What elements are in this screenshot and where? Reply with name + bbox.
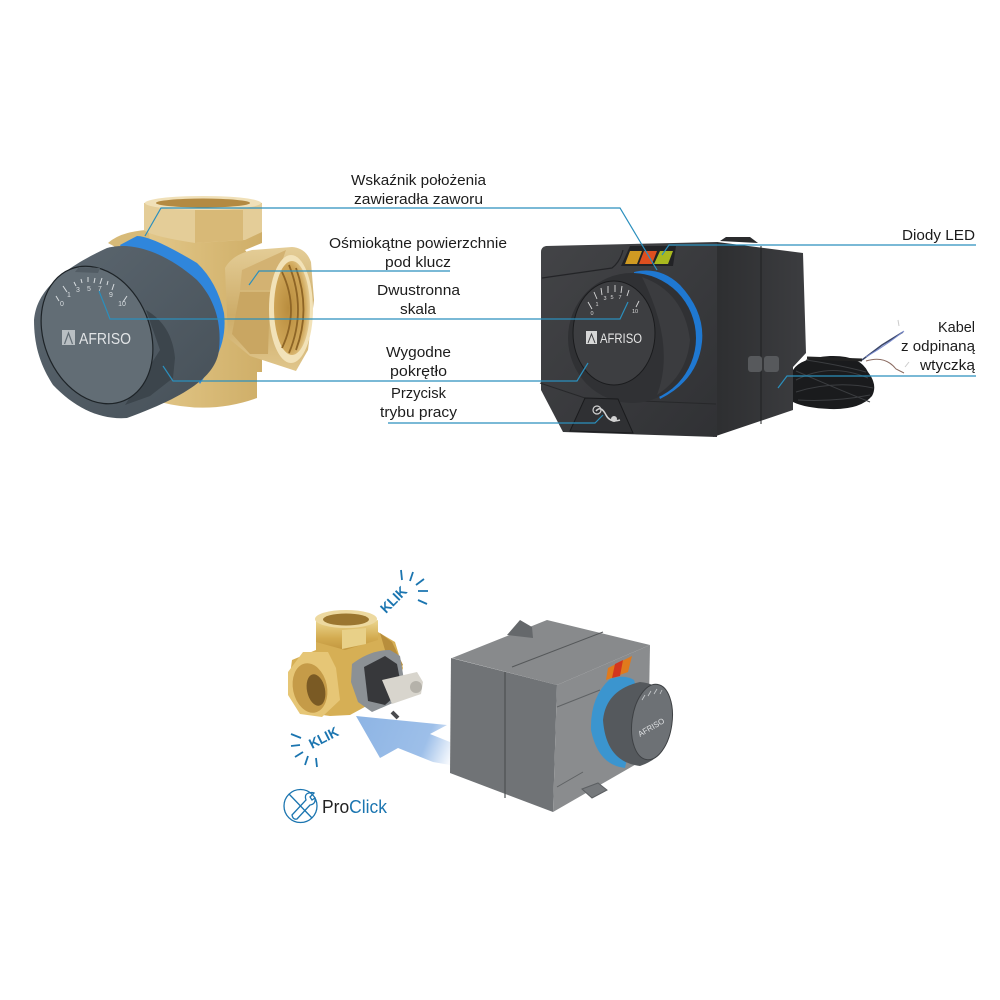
label: Wygodne pokrętło	[386, 344, 451, 380]
blue position ring	[120, 236, 225, 384]
actuator knob	[568, 273, 696, 403]
label: Kabel z odpinaną wtyczką	[901, 319, 976, 374]
gray knob	[603, 682, 672, 766]
coupling	[351, 650, 423, 718]
knob body	[34, 246, 220, 418]
knob face with scale: 9	[109, 292, 113, 299]
valve brass body	[108, 196, 314, 408]
actuator dial face: 10	[632, 309, 638, 315]
left face	[450, 658, 557, 812]
gray actuator LEDs	[606, 656, 632, 680]
knob face with scale: 0	[60, 301, 64, 308]
LED indicators	[621, 246, 676, 266]
insertion arrow	[356, 716, 450, 765]
actuator dial face	[573, 281, 655, 385]
label: Wygodne pokrętło: pokrętło	[390, 363, 447, 380]
label: Wskaźnik położenia zawieradła zaworu	[351, 172, 487, 208]
label: Dwustronna skala	[377, 282, 461, 318]
knob face with scale	[21, 249, 173, 421]
actuator dial face: 3	[603, 296, 607, 302]
label: Wskaźnik położenia zawieradła zaworu: zawieradła zaworu	[354, 191, 483, 208]
knob face with scale: 5	[87, 286, 91, 293]
label: Ośmiokątne powierzchnie pod klucz: Ośmiokątne powierzchnie	[329, 235, 507, 252]
mode button	[570, 398, 633, 433]
actuator dial face: 5	[610, 295, 614, 301]
actuator dial face: 7	[618, 295, 622, 301]
label: Kabel z odpinaną wtyczką: wtyczką	[919, 357, 976, 374]
KLIK bottom: KLIK	[306, 723, 341, 752]
ProClick logo	[284, 790, 388, 822]
label: Ośmiokątne powierzchnie pod klucz: pod klucz	[385, 254, 451, 271]
label: Ośmiokątne powierzchnie pod klucz	[329, 235, 507, 271]
label: Przycisk trybu pracy: trybu pracy	[380, 404, 458, 421]
knob face with scale: 10	[118, 301, 126, 308]
right face	[553, 645, 650, 812]
AFRISO logo: AFRISO	[600, 331, 642, 346]
brass valve with knob	[21, 196, 314, 421]
icon: crossed wrench	[284, 790, 317, 822]
label: Diody LED: Diody LED	[902, 227, 975, 244]
label: Kabel z odpinaną wtyczką: Kabel	[938, 319, 975, 336]
blue ring	[634, 271, 702, 399]
label: Kabel z odpinaną wtyczką: z odpinaną	[901, 338, 976, 355]
actuator dial face: 0	[590, 311, 594, 317]
AFRISO logo	[62, 330, 131, 348]
black actuator with cable	[540, 237, 909, 437]
actuator front	[541, 242, 717, 437]
top face	[452, 620, 650, 685]
actuator dial face: 1	[595, 302, 599, 308]
coiled cable	[793, 356, 874, 409]
label: Przycisk trybu pracy: Przycisk	[391, 385, 446, 402]
KLIK top: KLIK	[377, 583, 410, 616]
KLIK bottom	[291, 723, 341, 767]
knob face with scale: 7	[98, 286, 102, 293]
gray knob face: AFRISO	[636, 716, 666, 739]
gray mode button	[582, 783, 607, 798]
AFRISO logo: AFRISO	[79, 331, 131, 348]
gray knob face	[627, 682, 677, 762]
ProClick logo: ProClick	[322, 796, 388, 817]
knob face with scale: 1	[67, 292, 71, 299]
label: Dwustronna skala: Dwustronna	[377, 282, 461, 299]
label: Przycisk trybu pracy	[380, 385, 458, 421]
knob face with scale: 3	[76, 287, 80, 294]
label: Wygodne pokrętło: Wygodne	[386, 344, 451, 361]
label: Wskaźnik położenia zawieradła zaworu: Wskaźnik położenia	[351, 172, 487, 189]
gray actuator	[450, 620, 677, 812]
cable wires	[807, 320, 909, 373]
small brass valve with coupling	[288, 610, 423, 718]
actuator clips	[748, 356, 779, 372]
blue ring	[591, 677, 640, 768]
actuator side	[713, 242, 806, 437]
label: Dwustronna skala: skala	[400, 301, 437, 318]
KLIK top	[377, 570, 428, 616]
leader lines	[99, 208, 976, 423]
